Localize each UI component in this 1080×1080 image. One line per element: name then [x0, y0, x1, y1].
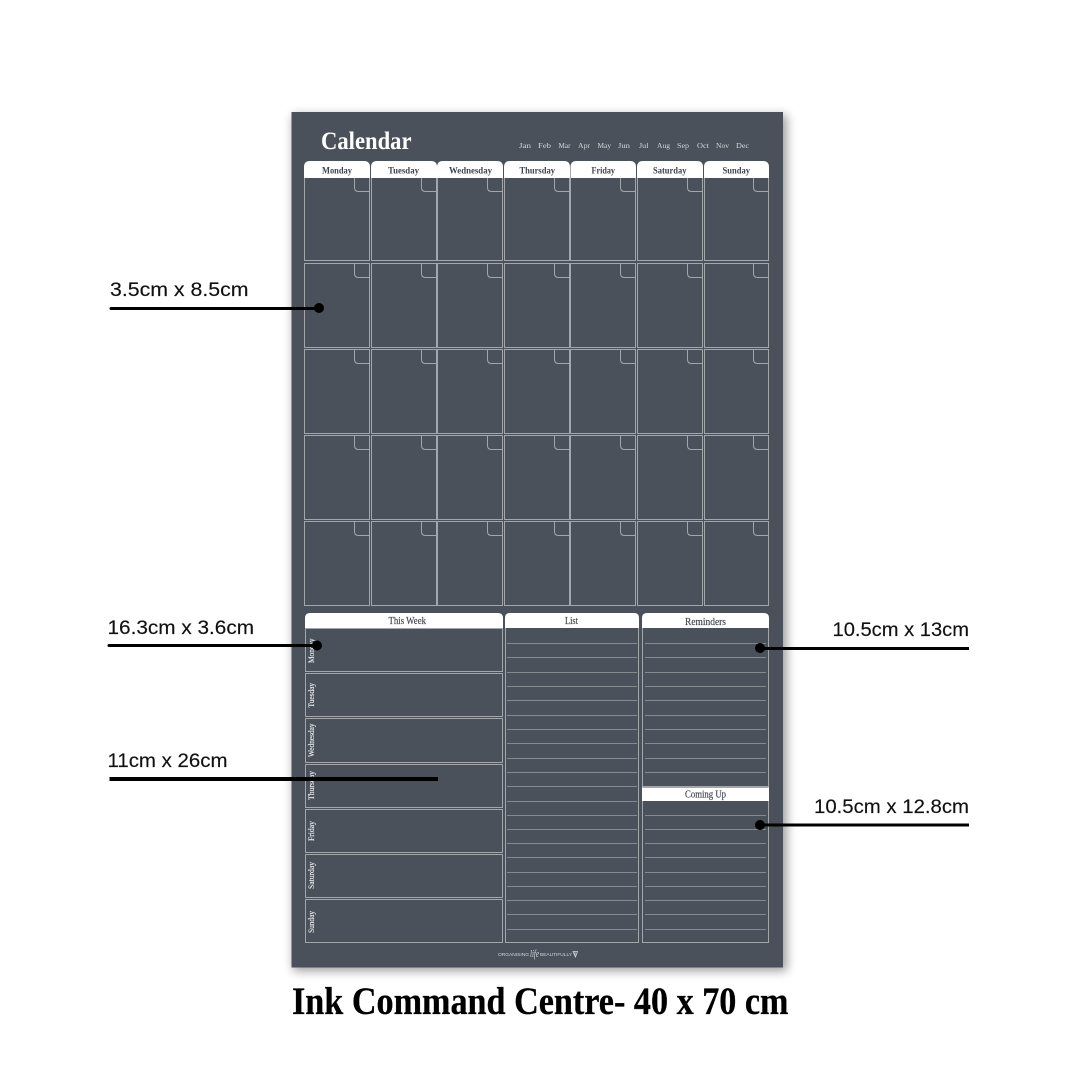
reminders heading: Reminders	[685, 617, 726, 628]
icon: heart mark	[573, 952, 578, 957]
month list: Jun	[618, 141, 630, 150]
vertical day labels: Wednesday	[306, 723, 316, 757]
weekday header tabs	[304, 161, 769, 178]
list ruled lines	[507, 644, 637, 930]
board shadow	[293, 115, 787, 971]
callout: 10.5cm x 12.8cm: 10.5cm x 12.8cm	[814, 797, 969, 818]
weekday header tabs: Friday	[592, 166, 615, 176]
brand footer: BEAUTIFULLY	[540, 952, 572, 957]
callout: 10.5cm x 13cm	[755, 620, 969, 653]
weekday header tabs: Monday	[322, 166, 352, 176]
weekday header tabs: Wednesday	[449, 166, 492, 176]
callout: 3.5cm x 8.5cm	[110, 280, 324, 313]
vertical day labels: Thursday	[306, 770, 316, 800]
callout: 10.5cm x 12.8cm	[755, 797, 969, 830]
month list: Apr	[578, 141, 591, 150]
vertical day labels: Monday	[306, 638, 316, 663]
month list: Aug	[657, 141, 670, 150]
brand footer: life	[530, 948, 539, 960]
callout: 16.3cm x 3.6cm	[108, 618, 322, 650]
this week day rows	[306, 628, 502, 942]
vertical day labels	[306, 638, 316, 933]
callout: 11cm x 26cm: 11cm x 26cm	[108, 751, 228, 772]
weekday header tabs: Thursday	[520, 166, 555, 176]
vertical day labels: Friday	[306, 820, 316, 841]
weekday header tabs: Saturday	[653, 166, 687, 176]
weekday header tabs: Sunday	[722, 166, 750, 176]
month list: May	[598, 141, 611, 150]
weekday header tabs: Tuesday	[388, 166, 419, 176]
calendar week row 4	[304, 436, 768, 520]
title: product name and size: Ink Command Centre- 40 x 70 cm	[292, 980, 788, 1023]
month list: Oct	[697, 141, 710, 150]
month list	[519, 141, 750, 150]
list heading: List	[565, 616, 578, 627]
calendar week row 5	[304, 522, 768, 606]
vertical day labels: Saturday	[306, 861, 316, 889]
calendar week row 2	[304, 264, 768, 348]
this week heading: This Week	[388, 616, 427, 627]
vertical day labels: Sunday	[306, 910, 316, 933]
panel: reminders	[642, 613, 769, 942]
month list: Nov	[716, 141, 729, 150]
month list: Dec	[736, 141, 750, 150]
callout: 3.5cm x 8.5cm: 3.5cm x 8.5cm	[110, 280, 248, 301]
board: command centre	[292, 112, 783, 968]
month list: Mar	[558, 141, 571, 150]
calendar week row 3	[304, 350, 768, 434]
month list: Jan	[519, 141, 531, 150]
brand footer	[498, 948, 578, 960]
panel: coming up	[642, 788, 769, 930]
month list: Sep	[677, 141, 689, 150]
heading: Calendar: Calendar	[321, 128, 412, 155]
coming up ruled lines	[645, 816, 766, 930]
month list: Feb	[538, 141, 551, 150]
reminders ruled lines	[645, 644, 766, 772]
callout: 11cm x 26cm	[108, 751, 438, 781]
coming up heading: Coming Up	[685, 790, 726, 800]
brand footer: ORGANISING	[498, 952, 530, 957]
calendar week row 1	[304, 178, 768, 260]
callout: 16.3cm x 3.6cm: 16.3cm x 3.6cm	[108, 618, 254, 639]
callout: 10.5cm x 13cm: 10.5cm x 13cm	[832, 620, 969, 641]
month list: Jul	[639, 141, 648, 150]
vertical day labels: Tuesday	[306, 682, 316, 708]
panel: list	[505, 613, 639, 942]
panel: this week	[305, 613, 503, 942]
